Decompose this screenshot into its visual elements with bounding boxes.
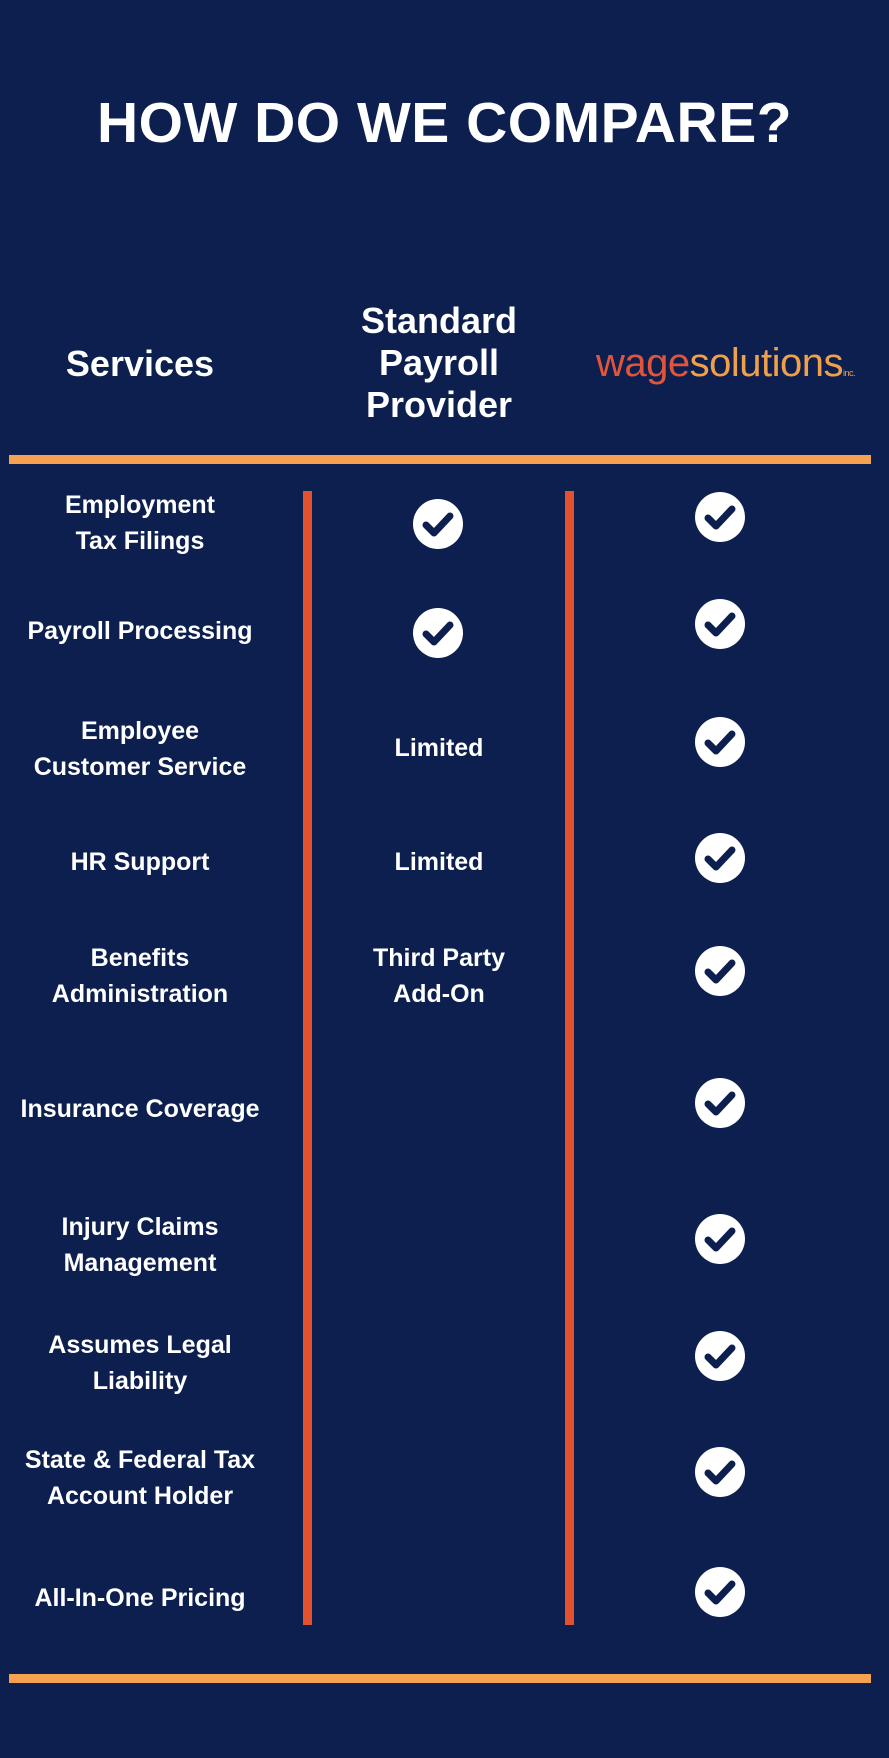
text: Payroll Processing — [27, 617, 253, 645]
logo: wagesolutions: wagesolutionsinc. — [596, 341, 855, 385]
text: Limited — [395, 848, 483, 876]
header: services: Services — [66, 343, 214, 384]
standard provider column — [373, 499, 505, 1008]
divider line 2 — [565, 491, 574, 1625]
text: Assumes Legal — [48, 1331, 232, 1359]
text: Management — [64, 1249, 216, 1277]
text: Injury Claims — [62, 1213, 218, 1241]
text: Employment — [65, 491, 215, 519]
header: standard payroll provider: Standard — [361, 300, 517, 341]
text: Employee — [81, 717, 199, 745]
text: Third Party — [373, 944, 505, 972]
text: Limited — [395, 734, 483, 762]
title: HOW DO WE COMPARE? — [97, 91, 792, 155]
divider line 1 — [303, 491, 312, 1625]
text: Administration — [52, 980, 228, 1008]
text: State & Federal Tax — [25, 1446, 255, 1474]
service labels — [20, 491, 260, 1612]
text: Account Holder — [47, 1482, 233, 1510]
text: Tax Filings — [76, 527, 204, 555]
header: standard payroll provider: Provider — [366, 384, 512, 425]
text: Insurance Coverage — [20, 1095, 260, 1123]
text: All-In-One Pricing — [34, 1584, 246, 1612]
header: standard payroll provider: Payroll — [379, 342, 499, 383]
text: Customer Service — [34, 753, 246, 781]
text: HR Support — [71, 848, 209, 876]
text: Benefits — [91, 944, 189, 972]
wagesolutions column checks — [695, 492, 745, 1617]
text: Add-On — [393, 980, 485, 1008]
text: Liability — [93, 1367, 187, 1395]
header: standard payroll provider — [361, 300, 517, 425]
